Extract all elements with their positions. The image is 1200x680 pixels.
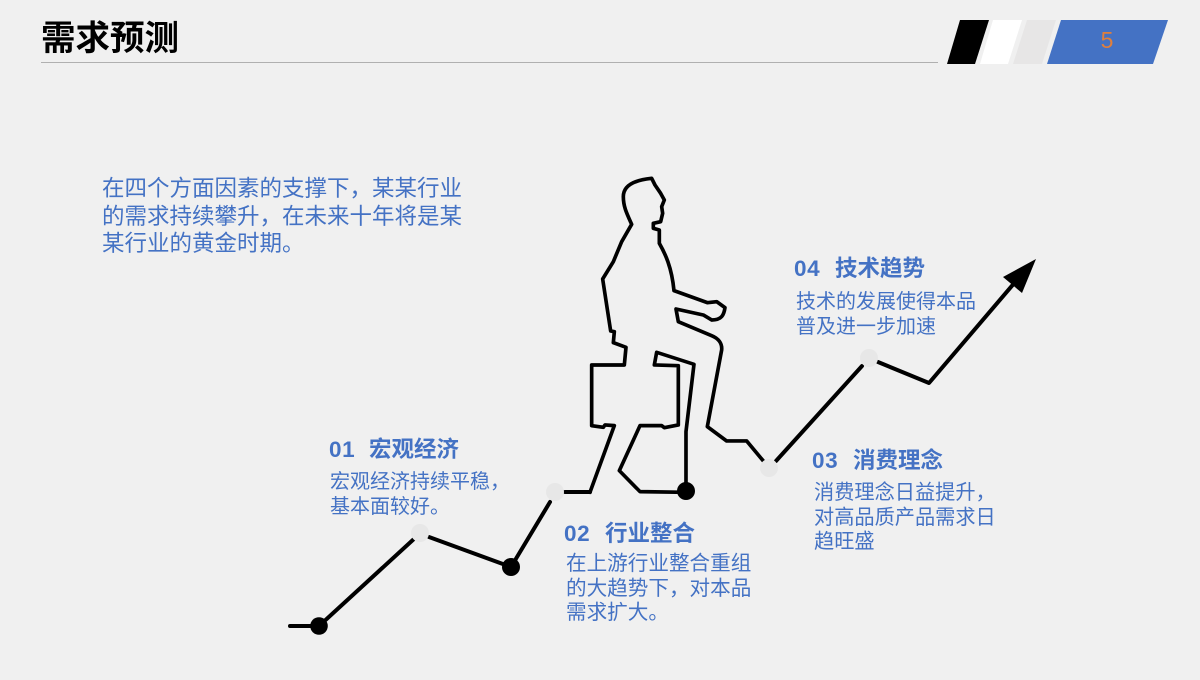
item 02 heading: 行业整合 (605, 521, 695, 546)
black nodes (310, 482, 695, 635)
item 04 heading: 04 (794, 256, 820, 281)
item 04 text (796, 290, 976, 338)
silhouette: businessman with briefcase (590, 178, 763, 492)
item 04 text: 技术的发展使得本品 (796, 291, 976, 313)
item 04 heading: 技术趋势 (835, 256, 925, 281)
line: lower rising segments (290, 492, 590, 626)
intro text: 在四个方面因素的支撑下，某某行业 (102, 176, 462, 201)
item 02 heading (564, 521, 695, 546)
item 03 text: 对高品质产品需求日 (814, 507, 996, 529)
item 04 text: 普及进一步加速 (796, 316, 936, 338)
item 03 heading: 03 (812, 448, 838, 473)
line: upper rising segments (776, 274, 1022, 461)
item 04 heading (794, 256, 925, 281)
grey nodes (411, 349, 878, 542)
item 02 text: 需求扩大。 (566, 601, 669, 624)
intro text (102, 176, 462, 256)
item 01 text: 基本面较好。 (330, 496, 450, 518)
intro text: 的需求持续攀升，在未来十年将是某 (102, 204, 462, 229)
item 03 text: 消费理念日益提升， (814, 482, 996, 504)
item 02 heading: 02 (564, 521, 590, 546)
item 03 heading: 消费理念 (853, 448, 943, 473)
title: 需求预测 (41, 20, 179, 58)
item 01 heading: 宏观经济 (369, 437, 459, 462)
item 02 text (566, 552, 751, 624)
item 01 heading (329, 437, 459, 462)
arrow head (1003, 259, 1036, 293)
item 03 heading (812, 448, 943, 473)
intro text: 某行业的黄金时期。 (102, 231, 305, 256)
item 01 heading: 01 (329, 437, 355, 462)
header stripes with page number: 5 (1101, 27, 1113, 53)
header stripes with page number (947, 20, 1168, 64)
item 03 text: 趋旺盛 (814, 531, 875, 553)
item 01 text: 宏观经济持续平稳， (330, 471, 510, 493)
item 02 text: 的大趋势下，对本品 (566, 577, 751, 600)
item 01 text (330, 471, 510, 518)
item 02 text: 在上游行业整合重组 (566, 552, 751, 575)
item 03 text (814, 481, 996, 553)
header divider (41, 62, 938, 63)
